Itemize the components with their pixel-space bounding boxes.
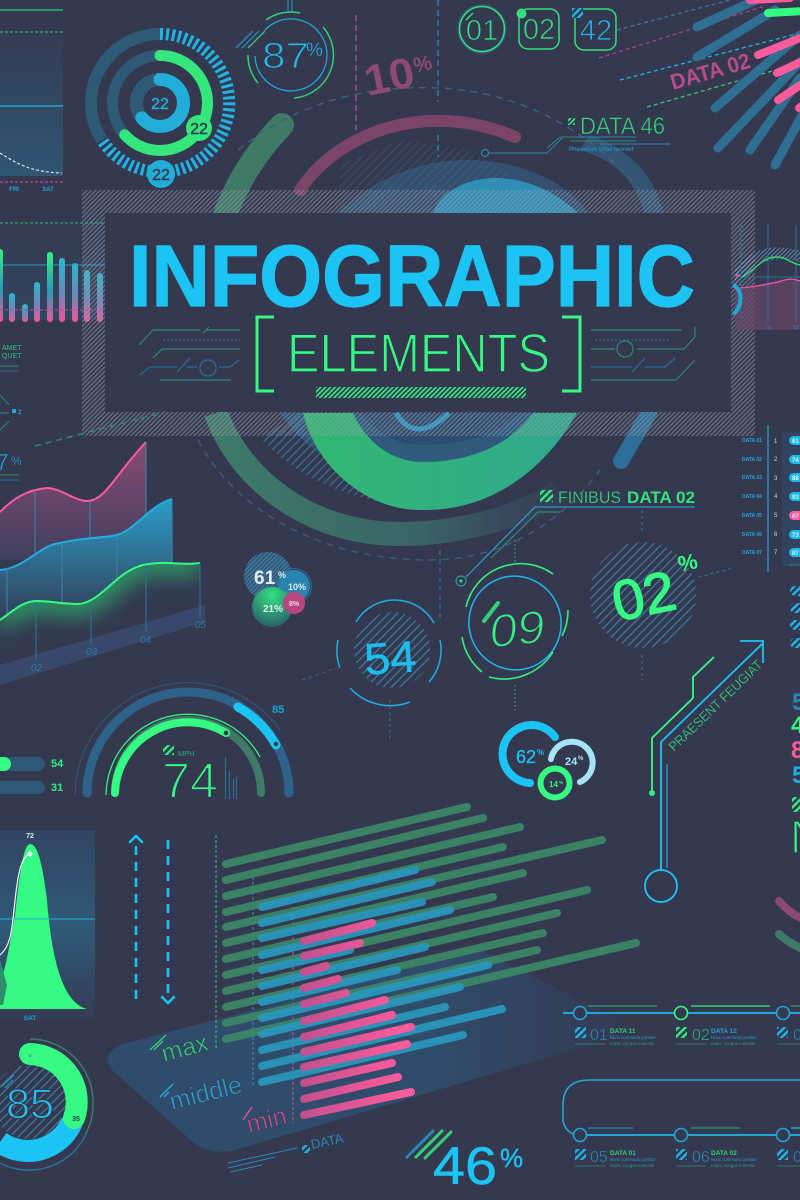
right mini line chart: 02 <box>793 325 799 331</box>
ring chart 22: 22 <box>152 167 170 184</box>
dial 54: 54 <box>363 632 418 685</box>
step 02: Nunc commodo porttitor <box>711 1035 757 1040</box>
donuts 62% 24% 14%: % <box>537 748 544 757</box>
right edge arcs <box>779 901 800 950</box>
speedometer 74 MPH: 74 <box>162 753 218 809</box>
donuts 62% 24% 14% <box>503 725 593 798</box>
label DATA 46 <box>482 113 670 156</box>
frame: hatched title border <box>82 190 755 436</box>
subtitle: ELEMENTS with brackets <box>257 317 580 398</box>
step 05: 05 <box>590 1149 608 1166</box>
pink 10%: 10 <box>360 49 419 106</box>
numbered badges 01 02 42: 01 <box>466 15 498 47</box>
donuts 62% 24% 14%: 24 <box>565 756 578 768</box>
data table right: DATA 07 <box>742 550 762 556</box>
label DATA 46: Phasellus vitae laoreet <box>569 147 634 153</box>
step 06: 06 <box>692 1149 710 1166</box>
pink 10% <box>360 44 438 106</box>
bubble chart: 10% <box>288 582 306 592</box>
stacked area chart: 02 <box>31 663 43 674</box>
step 02 <box>676 1027 757 1046</box>
dial 02% <box>590 510 733 680</box>
donuts 62% 24% 14%: % <box>559 780 563 785</box>
circuit decoration left <box>139 327 240 380</box>
central background graphic <box>198 88 664 560</box>
left side note labels: QUET <box>2 353 22 360</box>
step 05: turpis, congue molestie <box>610 1163 655 1168</box>
step 06: DATA 02 <box>711 1150 737 1157</box>
ring chart 22: 22 <box>151 96 169 113</box>
step 02: 02 <box>692 1027 710 1044</box>
axis labels max middle min: middle <box>167 1071 245 1116</box>
data table right: 88 <box>792 476 799 482</box>
tray under bar chart <box>108 950 640 1152</box>
dial 54 <box>302 550 441 738</box>
step 01: 01 <box>590 1027 608 1044</box>
right edge numbers <box>790 689 800 863</box>
ring chart 22: 22 <box>190 121 208 138</box>
data table right: DATA 01 <box>742 438 762 444</box>
left bar chart <box>0 223 105 322</box>
right mini line chart <box>733 223 800 331</box>
step 06: Nunc commodo porttitor <box>711 1157 757 1162</box>
radial burst DATA 02 <box>599 0 800 165</box>
data table right: DATA 02 <box>742 457 762 463</box>
step 07 partial <box>777 1149 800 1166</box>
bubble chart: 8% <box>289 601 300 608</box>
data table right: DATA 04 <box>742 494 762 500</box>
step 05 <box>575 1149 656 1168</box>
numbered badges 01 02 42 <box>458 5 616 53</box>
axis labels max middle min <box>150 1028 345 1172</box>
bell curve panel <box>0 830 95 1022</box>
donuts 62% 24% 14%: 62 <box>516 747 536 767</box>
step 02: turpis, congue molestie <box>711 1041 756 1046</box>
data table right: DATA 05 <box>742 513 762 519</box>
data table right: 87 <box>792 551 799 557</box>
donuts 62% 24% 14%: % <box>578 756 584 762</box>
donuts 62% 24% 14%: 14 <box>549 780 558 789</box>
46% figure <box>407 1131 523 1196</box>
progress bars 54 and 31 <box>0 757 64 794</box>
data table right: DATA 03 <box>742 475 762 481</box>
gauge 87%: 87 <box>262 35 309 76</box>
left side note labels: AMET <box>2 345 22 352</box>
ring chart 22 <box>91 34 229 188</box>
arrow PRAESENT FEUGIAT <box>645 641 765 902</box>
axis labels max middle min: DATA <box>310 1130 345 1152</box>
data table right: DATA 06 <box>742 532 762 538</box>
label DATA 46: DATA 46 <box>580 113 665 140</box>
step 02: DATA 12 <box>711 1028 737 1035</box>
title panel <box>105 213 731 412</box>
speedometer 74 MPH: MPH <box>178 749 195 758</box>
slanted bars: max series <box>226 807 636 1039</box>
timeline row 2 <box>563 1080 800 1168</box>
data table right <box>742 425 800 648</box>
donut 85: × <box>28 1053 32 1060</box>
bubble chart: 61 <box>254 568 276 589</box>
data table right: 73 <box>792 533 799 539</box>
stacked area chart: 04 <box>140 635 152 646</box>
dial 09 with callout FINIBUS DATA 02: 09 <box>486 600 547 658</box>
left side note labels: 2 <box>18 410 22 416</box>
right mini line chart: 01 <box>766 325 772 331</box>
46% figure: 46 <box>433 1137 497 1196</box>
step 01: Nunc commodo porttitor <box>610 1035 656 1040</box>
data table right: 1 <box>774 439 778 445</box>
data table right: 7 <box>774 550 778 556</box>
speedometer 74 MPH <box>75 683 289 809</box>
top-left weekly line chart <box>0 10 63 193</box>
step 06 <box>676 1149 757 1168</box>
data table right: 93 <box>792 495 799 501</box>
slanted bars: middle series <box>262 870 502 1082</box>
dashed guide lines <box>356 0 438 157</box>
subtitle: ELEMENTS with brackets: ELEMENTS <box>287 322 550 384</box>
data table right: 61 <box>792 439 799 445</box>
step 01: DATA 11 <box>610 1028 636 1035</box>
donut 85 <box>0 1039 93 1170</box>
gauge 87%: % <box>306 40 323 61</box>
46% figure: % <box>500 1143 523 1173</box>
bubble chart <box>244 552 312 627</box>
data table right: 67 <box>792 514 799 520</box>
data table right: 5 <box>774 513 778 519</box>
step 06: turpis, congue molestie <box>711 1163 756 1168</box>
gauge 87% <box>236 0 333 98</box>
donut 85: 35 <box>72 1116 80 1123</box>
dial 02%: % <box>676 548 700 577</box>
donut 85: 85 <box>6 1080 54 1127</box>
data table right: 74 <box>792 458 799 464</box>
top-left weekly line chart: SAT <box>42 187 54 193</box>
step 05: DATA 01 <box>610 1150 636 1157</box>
bell curve panel: SAT <box>24 1015 36 1022</box>
dial 09 with callout FINIBUS DATA 02: DATA 02 <box>627 488 695 507</box>
dial 09 with callout FINIBUS DATA 02 <box>456 488 695 710</box>
top-left weekly line chart: FRI <box>9 187 19 193</box>
data table right: 2 <box>774 457 778 463</box>
bubble chart: % <box>278 570 286 580</box>
arrow PRAESENT FEUGIAT: PRAESENT FEUGIAT <box>666 657 765 754</box>
stacked area chart: 05 <box>195 620 207 631</box>
stacked area chart <box>0 442 207 685</box>
title: INFOGRAPHIC: INFOGRAPHIC <box>129 228 695 325</box>
step 03 partial <box>777 1027 800 1044</box>
data table right: 4 <box>774 494 778 500</box>
left side note labels <box>0 345 165 480</box>
left side note labels: % <box>11 454 22 468</box>
step 01 <box>575 1027 656 1046</box>
dial 09 with callout FINIBUS DATA 02: FINIBUS <box>558 488 621 507</box>
numbered badges 01 02 42: 02 <box>523 14 555 46</box>
dial 02%: 02 <box>606 558 681 633</box>
axis labels max middle min: min <box>244 1102 290 1139</box>
axis labels max middle min: max <box>158 1028 212 1068</box>
dashed scale markers <box>216 835 293 1123</box>
progress bars 54 and 31: 54 <box>51 758 64 770</box>
pink 10%: % <box>411 51 435 78</box>
data table right: 3 <box>774 476 778 482</box>
stacked area chart: 03 <box>86 647 98 658</box>
bell curve panel: 72 <box>26 833 34 840</box>
radial burst DATA 02: DATA 02 <box>667 48 753 95</box>
data table right: 6 <box>774 532 778 538</box>
double dashed arrows <box>130 836 174 1003</box>
step 05: Nunc commodo porttitor <box>610 1157 656 1162</box>
slanted bars: min series <box>304 923 411 1115</box>
step 01: turpis, congue molestie <box>610 1041 655 1046</box>
circuit decoration right <box>591 327 695 380</box>
numbered badges 01 02 42: 42 <box>580 15 612 47</box>
bubble chart: 21% <box>263 604 283 615</box>
speedometer 74 MPH: 85 <box>272 704 284 716</box>
progress bars 54 and 31: 31 <box>51 782 63 794</box>
timeline row 1 <box>563 1006 800 1046</box>
